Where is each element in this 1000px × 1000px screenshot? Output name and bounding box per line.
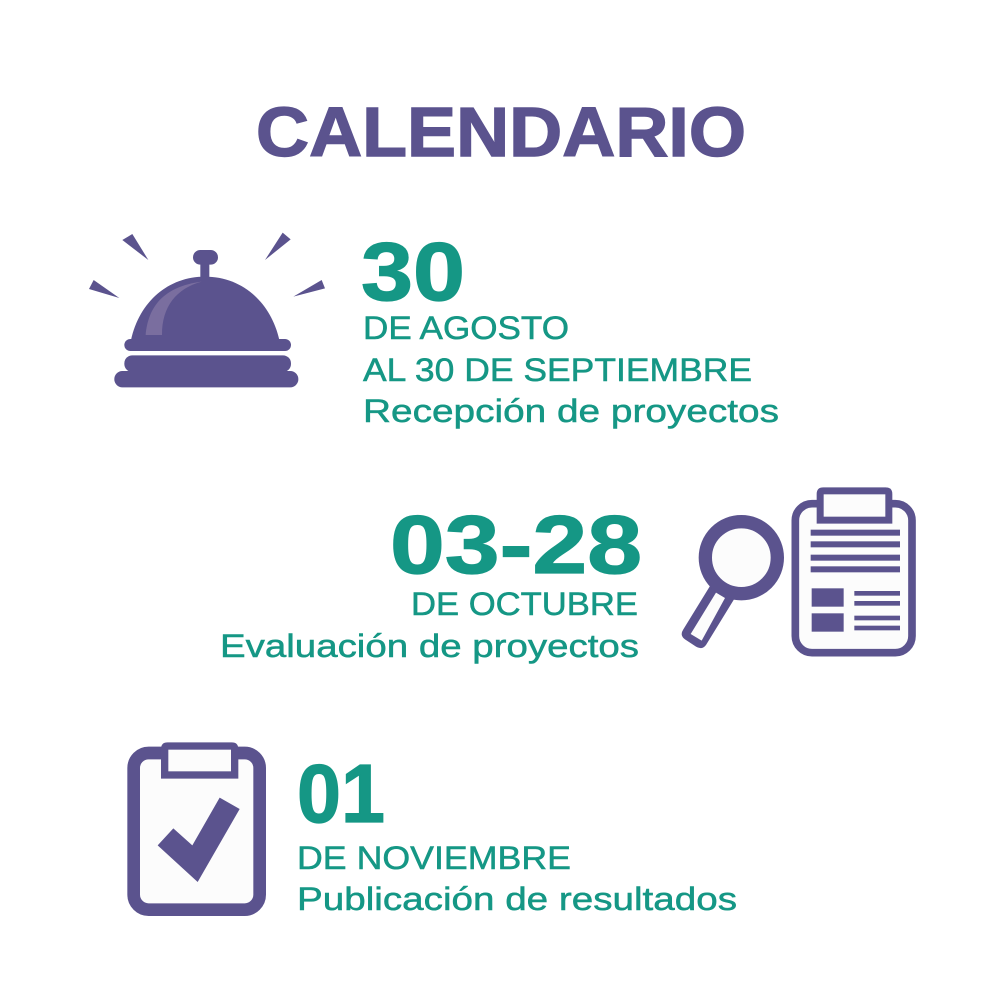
date: 30: 30: [361, 225, 465, 318]
date line: de octubre: DE OCTUBRE: [411, 586, 638, 622]
date line: de noviembre: DE NOVIEMBRE: [297, 840, 571, 876]
icon: magnifier and document: [682, 487, 912, 653]
text block: reception dates: [361, 225, 779, 429]
date: 01: 01: [297, 747, 385, 840]
description: results: Publicación de resultados: [297, 881, 737, 917]
text block: evaluation dates: [220, 498, 642, 664]
date line: al 30 de septiembre: AL 30 DE SEPTIEMBRE: [363, 352, 752, 388]
document clipboard: [795, 487, 912, 653]
title: CALENDARIO: [256, 93, 746, 171]
magnifier: [682, 522, 777, 648]
icon: service bell: [89, 233, 325, 387]
description: reception: Recepción de proyectos: [363, 393, 779, 429]
date line: de agosto: DE AGOSTO: [363, 310, 569, 346]
date: 03-28: 03-28: [390, 498, 642, 591]
icon: clipboard with check: [134, 742, 260, 910]
text block: results dates: [297, 747, 737, 917]
description: evaluation: Evaluación de proyectos: [220, 628, 639, 664]
